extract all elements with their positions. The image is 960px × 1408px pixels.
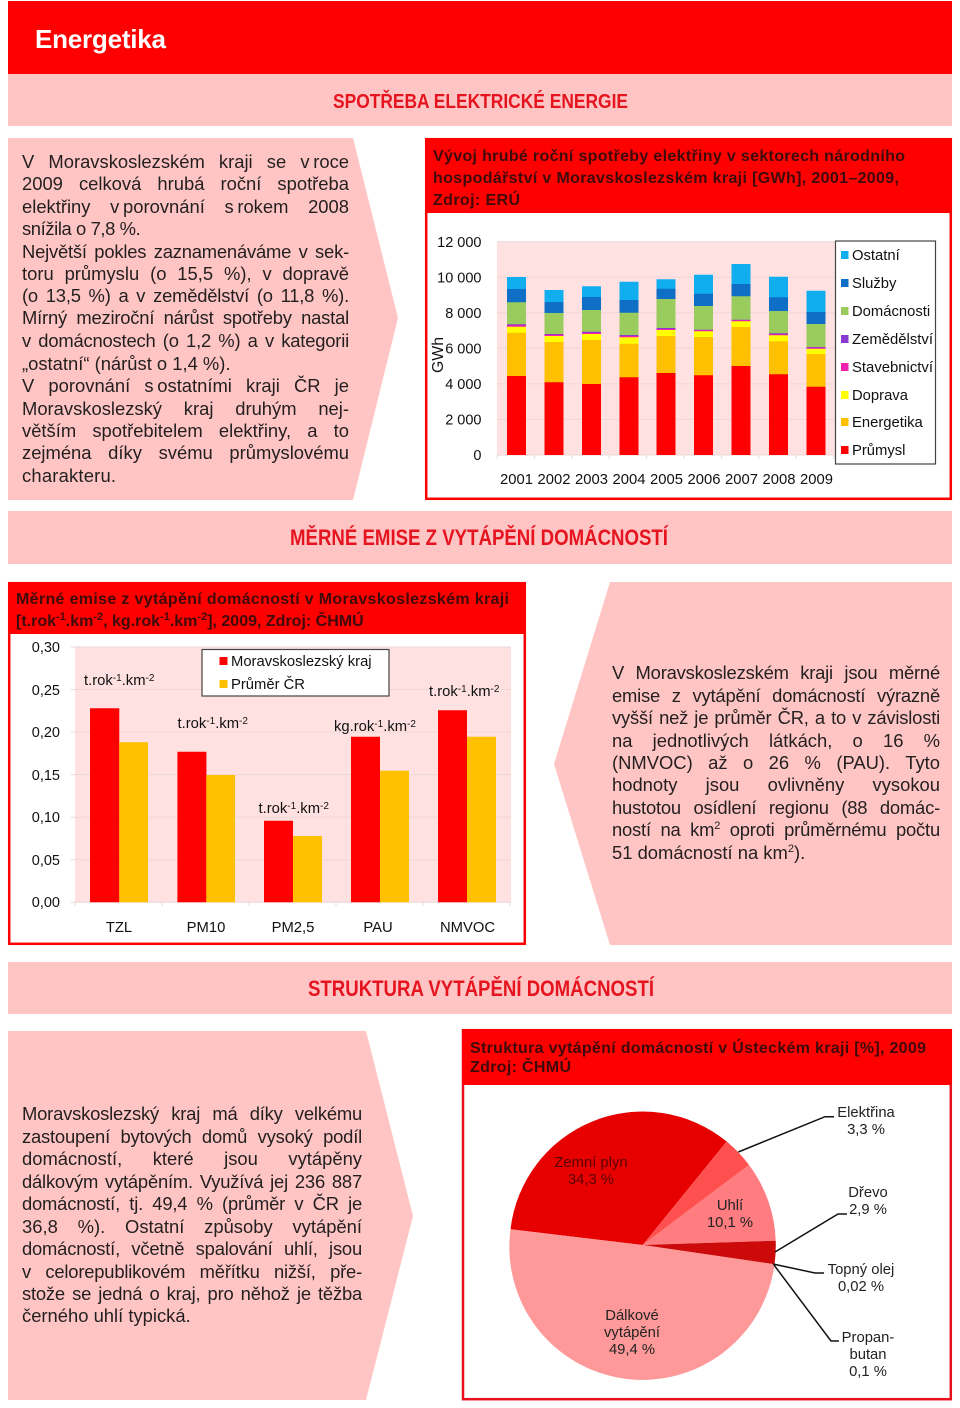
pie labels: Zemní plyn: [554, 1155, 628, 1171]
y axis labels: 0,10: [32, 810, 60, 826]
unit annotations: -1: [458, 684, 467, 695]
stacked bars: [507, 264, 826, 455]
text block: specific emissions: (NMVOC) až o 26 % (PAU). Tyto: [612, 752, 940, 773]
y axis labels: 12 000: [437, 235, 482, 251]
text block: electricity consumption: Největší pokles zaznamenáváme v sek-: [22, 241, 349, 262]
text block: heating structure: stože se jedná o kraj, pro něhož je těžba: [22, 1283, 362, 1304]
x axis labels: PM2,5: [272, 920, 314, 936]
text block: electricity consumption: [22, 151, 349, 486]
x axis labels: 2009: [800, 472, 833, 488]
x axis labels: TZL: [106, 920, 132, 936]
legend: Zemědělství: [852, 332, 934, 348]
pie labels: Propan-: [842, 1330, 894, 1346]
bars: Průměr ČR: [119, 737, 496, 902]
pie labels: Elektřina: [837, 1105, 896, 1121]
y axis labels: [437, 235, 482, 464]
unit annotations: -2: [491, 684, 500, 695]
chart heading: -2: [93, 611, 103, 623]
unit annotations: -2: [407, 719, 416, 730]
text block: electricity consumption: V porovnání s ostatními kraji ČR je: [22, 375, 349, 396]
text block: specific emissions: vyšší než je průměr ČR, a to v závislosti: [612, 707, 940, 728]
pie labels: Dálkové: [605, 1308, 659, 1324]
text block: electricity consumption: elektřiny v porovnání s rokem 2008: [22, 196, 349, 217]
y axis labels: 0,25: [32, 683, 60, 699]
unit annotations: .km: [383, 719, 407, 735]
panel: consumption text background: [8, 138, 398, 500]
y axis labels: [32, 640, 60, 911]
y axis labels: 0,30: [32, 640, 60, 656]
section heading: heating structure: [8, 962, 952, 1014]
y axis labels: 0,20: [32, 725, 60, 741]
chart heading: Vývoj hrubé roční spotřeby elektřiny v sektorech národního: [433, 148, 905, 165]
unit annotations: -1: [113, 673, 122, 684]
legend: Stavebnictví: [852, 360, 934, 376]
text block: specific emissions: ností na km2 oproti průměrnému počtu: [612, 819, 940, 840]
unit annotations: t.rok: [84, 673, 113, 689]
pie labels: [554, 1105, 896, 1380]
pie: [509, 1112, 776, 1380]
unit annotations: t.rok: [258, 801, 287, 817]
panel: heating pie chart: [462, 1029, 952, 1399]
legend: [202, 650, 389, 696]
chart heading: Zdroj: ČHMÚ: [470, 1057, 571, 1076]
text block: heating structure: domácností, tj. 49,4 % (průměr v ČR je: [22, 1193, 362, 1214]
pie labels: 3,3 %: [847, 1122, 885, 1138]
legend: Průměr ČR: [231, 676, 305, 693]
unit annotations: -1: [374, 719, 384, 730]
unit annotations: t.rok: [178, 716, 206, 732]
unit annotations: t.rok: [429, 684, 458, 700]
chart heading: Měrné emise z vytápění domácností v Moravskoslezském kraji: [16, 591, 509, 608]
text block: heating structure: černého uhlí typická.: [22, 1305, 191, 1326]
text block: electricity consumption: zejména díky svému průmyslovému: [22, 442, 349, 463]
header band: [8, 1, 952, 74]
x axis labels: 2004: [613, 472, 645, 488]
chart heading: .km: [66, 613, 93, 630]
chart heading: Struktura vytápění domácností v Ústeckém kraji [%], 2009: [470, 1038, 926, 1057]
legend: Ostatní: [852, 248, 901, 264]
unit annotations: .km: [215, 716, 239, 732]
unit annotations: -2: [320, 801, 329, 812]
text block: electricity consumption: „ostatní“ (nárůst o 1,4 %).: [22, 353, 231, 374]
text block: electricity consumption: větším spotřebitelem elektřiny, a to: [22, 420, 349, 441]
y axis labels: 10 000: [437, 270, 482, 286]
text block: heating structure: Moravskoslezský kraj má díky velkému: [22, 1103, 362, 1124]
text block: electricity consumption: toru průmyslu (o 15,5 %), v dopravě: [22, 263, 349, 284]
y axis labels: 0: [473, 448, 482, 464]
text block: specific emissions: hodnoty jsou ovlivněny vysokou: [612, 774, 940, 795]
text block: heating structure: domácností, včetně spalování uhlí, jsou: [22, 1238, 362, 1259]
pie labels: Dřevo: [848, 1185, 888, 1201]
text block: specific emissions: V Moravskoslezském kraji jsou měrné: [612, 662, 940, 683]
chart heading: [462, 1029, 952, 1085]
unit annotations: kg.rok: [334, 719, 374, 735]
text block: electricity consumption: (o 13,5 %) a v zemědělství (o 11,8 %).: [22, 285, 349, 306]
legend: Energetika: [852, 415, 924, 431]
text block: electricity consumption: Mírný meziroční nárůst spotřeby nastal: [22, 307, 349, 328]
header band: Energetika: [35, 24, 167, 54]
chart heading: -2: [197, 611, 207, 623]
text block: heating structure: v celorepublikovém měřítku nižší, pře-: [22, 1261, 362, 1282]
text block: specific emissions: emise z vytápění domácností výrazně: [612, 685, 940, 706]
pie labels: 0,1 %: [849, 1364, 887, 1380]
pie labels: Uhlí: [717, 1198, 744, 1214]
text block: electricity consumption: 2009 celková hrubá roční spotřeba: [22, 173, 349, 194]
section heading: specific emissions: MĚRNÉ EMISE Z VYTÁPĚNÍ DOMÁCNOSTÍ: [290, 525, 669, 550]
y axis labels: 6 000: [445, 342, 482, 358]
text block: electricity consumption: charakteru.: [22, 465, 116, 486]
pie labels: 0,02 %: [838, 1279, 884, 1295]
chart heading: .km: [170, 613, 197, 630]
x axis labels: 2001: [500, 472, 533, 488]
text block: heating structure: [22, 1103, 362, 1326]
text block: specific emissions: [612, 662, 940, 863]
section heading: electricity consumption: SPOTŘEBA ELEKTRICKÉ ENERGIE: [333, 89, 628, 113]
chart heading: , kg.rok: [103, 613, 160, 630]
y axis labels: 2 000: [445, 412, 482, 428]
bars: Moravskoslezský kraj: [90, 708, 467, 902]
pie labels: Topný olej: [828, 1262, 894, 1278]
legend: Domácnosti: [852, 304, 930, 320]
text block: electricity consumption: Moravskoslezský kraj druhým nej-: [22, 398, 349, 419]
unit annotations: -1: [287, 801, 297, 812]
x axis labels: NMVOC: [440, 920, 495, 936]
x axis labels: PAU: [363, 920, 393, 936]
x axis labels: 2002: [538, 472, 570, 488]
section heading: specific emissions: [8, 511, 952, 564]
pie labels: 34,3 %: [568, 1172, 614, 1188]
panel: heating text background: [8, 1031, 413, 1400]
text block: heating structure: dálkovým vytápěním. Využívá jej 236 887: [22, 1171, 362, 1192]
unit annotations: -2: [239, 716, 248, 727]
plot area: [497, 242, 835, 459]
text block: heating structure: 36,8 %). Ostatní způsoby vytápění: [22, 1216, 362, 1237]
unit annotations: -2: [146, 673, 155, 684]
unit annotations: [84, 673, 500, 817]
legend: Doprava: [852, 388, 909, 404]
text block: electricity consumption: V Moravskoslezském kraji se v roce: [22, 151, 349, 172]
pie labels: 2,9 %: [849, 1202, 887, 1218]
y axis labels: 0,15: [32, 768, 60, 784]
y axis labels: 8 000: [445, 306, 482, 322]
y axis labels: 4 000: [445, 377, 482, 393]
panel: emissions text background: [554, 582, 952, 945]
leader lines: [738, 1117, 847, 1341]
x axis labels: PM10: [187, 920, 225, 936]
x axis labels: 2003: [575, 472, 608, 488]
legend: Průmysl: [852, 443, 905, 459]
chart heading: [t.rok: [16, 613, 56, 630]
x axis labels: [106, 920, 495, 936]
unit annotations: .km: [296, 801, 320, 817]
chart heading: -1: [56, 611, 66, 623]
x axis labels: 2005: [650, 472, 683, 488]
chart heading: hospodářství v Moravskoslezském kraji [GWh], 2001–2009,: [433, 170, 899, 187]
chart heading: ], 2009, Zdroj: ČHMÚ: [207, 611, 364, 630]
pie labels: vytápění: [604, 1325, 661, 1341]
x axis labels: 2007: [725, 472, 758, 488]
pie labels: 49,4 %: [609, 1342, 655, 1358]
y axis labels: 0,05: [32, 853, 60, 869]
chart heading: Zdroj: ERÚ: [433, 190, 520, 209]
unit annotations: .km: [467, 684, 491, 700]
y axis title: GWh: [430, 337, 447, 373]
panel: consumption stacked bar chart: [425, 138, 952, 499]
legend: Služby: [852, 276, 897, 292]
text block: specific emissions: na jednotlivých látkách, o 16 %: [612, 730, 940, 751]
pie labels: butan: [849, 1347, 887, 1363]
x axis labels: [500, 472, 833, 488]
text block: electricity consumption: snížila o 7,8 %.: [22, 218, 140, 239]
section heading: heating structure: STRUKTURA VYTÁPĚNÍ DOMÁCNOSTÍ: [308, 976, 655, 1001]
x axis labels: 2008: [763, 472, 795, 488]
section heading: electricity consumption: [8, 74, 952, 126]
x axis labels: 2006: [688, 472, 720, 488]
legend: [836, 241, 936, 464]
unit annotations: -1: [206, 716, 216, 727]
pie labels: 10,1 %: [707, 1215, 753, 1231]
chart heading: -1: [160, 611, 170, 623]
legend: Moravskoslezský kraj: [231, 654, 372, 670]
text block: specific emissions: hustotou osídlení regionu (88 domác-: [612, 797, 940, 818]
text block: heating structure: zastoupení bytových domů vysoký podíl: [22, 1126, 362, 1147]
unit annotations: .km: [122, 673, 146, 689]
text block: heating structure: domácností, které jsou vytápěny: [22, 1148, 362, 1169]
text block: electricity consumption: v domácnostech (o 1,2 %) a v kategorii: [22, 330, 349, 351]
plot area: [71, 647, 511, 906]
chart heading: [425, 138, 952, 213]
text block: specific emissions: 51 domácností na km2).: [612, 842, 805, 863]
y axis labels: 0,00: [32, 895, 60, 911]
chart heading: [8, 582, 526, 634]
panel: emissions bar chart: [8, 582, 526, 944]
